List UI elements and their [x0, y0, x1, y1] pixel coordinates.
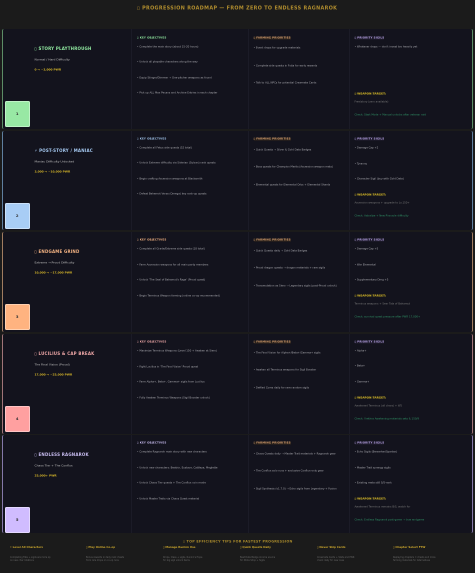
panel: stage 3 endgame grind: • Begin Terminus Weapon farming (online co-op recommended) — [137, 294, 220, 297]
panel: stage 1 story playthrough: • Talk to ALL NPCs for potential Crewmate Cards — [254, 82, 316, 85]
panel: stage 2 post-story maniac: • Elemental quests for Elemental Orbs + Elemental Shards — [254, 183, 330, 186]
stage number 3: 3 — [16, 314, 19, 319]
stage number 2: 2 — [16, 213, 19, 218]
priority sigils: ▯ PRIORITY SIGILS — [354, 340, 384, 344]
panel: stage 4 lucilius and cap break: • The Final Vision for Alpha+/Beta+/Gamma+ sigils — [254, 352, 320, 355]
panel: stage 3 endgame grind — [2, 232, 473, 332]
stage title: ▯ ENDLESS RAGNAROK — [34, 452, 89, 457]
panel: stage 1 story playthrough: • Equip Stinger/Dimmer → One-pitcher weapons as found — [137, 76, 212, 79]
panel: stage 3 endgame grind: • Transmutation as Siero → Legendary sigils (post-Proud unlock) — [254, 284, 337, 287]
power range: 25,000+ PWR — [34, 474, 57, 478]
panel: stage 4 lucilius and cap break: • Defiled Cores daily for rare random sigils — [254, 386, 309, 389]
weapon target — [354, 92, 386, 95]
power range: 17,000 → ~25,000 PWR — [34, 373, 72, 377]
priority sigils: ▯ PRIORITY SIGILS — [354, 36, 384, 40]
tip 3 — [163, 544, 202, 562]
panel: stage 5 endless ragnarok: • Unlock Master Traits via Chaos Quest material — [137, 497, 199, 500]
panel: stage 2 post-story maniac: • Damage Cap +2 — [354, 147, 378, 150]
panel: stage 5 endless ragnarok: • Complete Ragnarok main story with new characters — [137, 451, 207, 454]
panel: stage 3 endgame grind: • Damage Cap +5 — [354, 248, 378, 251]
tip 1: on new char rotations — [10, 559, 34, 562]
panel: stage 2 post-story maniac: • Begin crafting Ascension weapons at Blacksmith — [137, 177, 202, 180]
panel: stage 4 lucilius and cap break: Awakened Terminus (all chars) + W5 — [354, 405, 402, 408]
farming priorities: ▯ FARMING PRIORITIES — [254, 441, 291, 445]
stage title: ⚡ POST-STORY / MANIAC — [34, 148, 93, 153]
panel: stage 3 endgame grind: • War Elemental — [354, 263, 376, 266]
farming priorities — [254, 138, 291, 140]
priority sigils — [354, 442, 384, 444]
panel: stage 3 endgame grind: • Complete all Grade/Extreme side quests (18 total) — [137, 248, 205, 251]
stage title: ▯ LUCILIUS & CAP BREAK — [34, 351, 94, 356]
stage number 1: 1 — [16, 111, 19, 116]
panel: stage 5 endless ragnarok — [2, 435, 473, 533]
panel: stage 1 story playthrough: • Complete side quests in Fotia for early rewards — [254, 64, 317, 67]
panel: stage 3 endgame grind: • Supplementary Dmg +5 — [354, 279, 388, 282]
panel: stage 5 endless ragnarok: • Master Trait synergy sigils — [354, 466, 391, 469]
panel: stage 5 endless ragnarok: Awakened Terminus remains BiS, watch for — [354, 506, 410, 509]
priority sigils — [354, 37, 384, 39]
tip 5 — [317, 544, 354, 562]
tip 4 — [240, 544, 275, 562]
farming priorities — [254, 239, 291, 241]
priority sigils: ▯ PRIORITY SIGILS — [354, 238, 384, 242]
panel: stage 4 lucilius and cap break: • Gamma+ — [354, 381, 369, 384]
farming priorities — [254, 341, 291, 343]
key objectives: ▯ KEY OBJECTIVES — [137, 137, 166, 141]
panel: stage 4 lucilius and cap break: • Fight Lucilius in 'The Final Vision' Proud quest — [137, 365, 198, 368]
weapon target: ▯ WEAPON TARGET: — [354, 293, 386, 297]
panel: stage 1 story playthrough: Check: Start Mode + Manual unlocks after veteran raid — [354, 114, 426, 117]
panel: stage 2 post-story maniac — [2, 131, 473, 230]
tip 2: ▯ Play Online Co-op — [86, 544, 115, 548]
key objectives: ▯ KEY OBJECTIVES — [137, 238, 166, 242]
panel: stage 1 story playthrough: • Complete the main story (about 15-20 hours) — [137, 46, 198, 49]
tip 2: Bonus rewards in daily rank chests — [86, 556, 124, 559]
footer heading: ▯ TOP EFFICIENCY TIPS FOR FASTEST PROGRESSION — [183, 539, 293, 543]
panel: stage 2 post-story maniac: • Character Sigil (buy with Gold Data) — [354, 178, 404, 181]
panel: stage 2 post-story maniac: • Quick Quests → Silver & Gold Data Badges — [254, 148, 311, 151]
tip 6 — [393, 544, 436, 562]
panel: stage 5 endless ragnarok: • The Conflux solo runs + exclusive Conflux-only gear — [254, 470, 324, 473]
panel: stage 1 story playthrough: Free/story (zero available) — [354, 101, 388, 104]
tip 4: for Mode Shop + Sigils — [240, 559, 265, 562]
panel: stage 4 lucilius and cap break: Check: Vrethra Awakening materials sets & 150/9 — [354, 418, 419, 421]
weapon target — [354, 294, 386, 297]
panel: stage 4 lucilius and cap break: • Beta+ — [354, 365, 365, 368]
tip 5: ▯ Never Skip Cards — [317, 544, 345, 548]
difficulty: Extreme → Proud Difficulty — [34, 260, 74, 264]
tip 2 — [86, 544, 124, 562]
panel: stage 5 endless ragnarok: • Chaos Quests daily → Master Trait materials + Ragnarok gear — [254, 452, 336, 455]
panel: stage 4 lucilius and cap break: • Alpha+ — [354, 350, 366, 353]
tip 4: ▯ Quick Quests Daily — [240, 544, 271, 548]
stage number 1 — [5, 100, 30, 126]
panel: stage 3 endgame grind: • Unlock 'The Seal of Bahamut's Rage' (Proud quest) — [137, 279, 205, 282]
weapon target — [354, 497, 386, 500]
panel: stage 1 story playthrough: • Whatever drops — don't invest too heavily yet — [354, 46, 417, 49]
panel: stage 2 post-story maniac: • Boss quests for Champion Merits (Ascension weapon mats) — [254, 166, 333, 169]
power range: 10,000 → ~17,000 PWR — [34, 271, 72, 275]
weapon target: ▯ WEAPON TARGET: — [354, 91, 386, 95]
priority sigils — [354, 138, 384, 140]
panel: stage 5 endless ragnarok: • Existing meta still S/S-rank — [354, 482, 392, 485]
tip 6: farming materials for Alternatives — [393, 559, 430, 562]
weapon target — [354, 193, 386, 196]
panel: stage 4 lucilius and cap break: • Maximize Terminus Weapons (Level 150 + Awaken at Siero) — [137, 350, 217, 353]
tip 1: • Level All Characters — [10, 544, 43, 548]
priority sigils — [354, 239, 384, 241]
tip 3: for big sigil unlock items — [163, 559, 190, 562]
panel: stage 3 endgame grind: • Farm Ascension weapons for all main party members — [137, 263, 208, 266]
tip 1: Completing Fate + sigils are more xp — [10, 556, 51, 559]
weapon target: ▯ WEAPON TARGET: — [354, 395, 386, 399]
panel: stage 4 lucilius and cap break: • Awaken all Terminus weapons for Sigil Booster — [254, 369, 316, 372]
panel: stage 2 post-story maniac: • Tyranny — [354, 162, 367, 165]
key objectives: ▯ KEY OBJECTIVES — [137, 340, 166, 344]
farming priorities: ▯ FARMING PRIORITIES — [254, 340, 291, 344]
panel: stage 5 endless ragnarok: • Echo Sigils (Berserker/Spartan) — [354, 451, 397, 454]
stage number 4: 4 — [16, 416, 19, 421]
key objectives: ▯ KEY OBJECTIVES — [137, 36, 166, 40]
panel: stage 2 post-story maniac: • Unlock Extreme difficulty via Siderian (Sylvan) rank quests — [137, 162, 216, 165]
stage number 2 — [5, 202, 30, 228]
panel: stage 2 post-story maniac: Check: Astralize + New Pinnacle difficulty — [354, 215, 409, 218]
tip 1 — [10, 544, 51, 562]
priority sigils — [354, 341, 384, 343]
farming priorities — [254, 442, 291, 444]
tip 3: Drops, Class + sigils, Runinn's Hope — [163, 556, 202, 559]
priority sigils: ▯ PRIORITY SIGILS — [354, 441, 384, 445]
priority sigils: ▯ PRIORITY SIGILS — [354, 137, 384, 141]
panel: stage 4 lucilius and cap break — [2, 334, 473, 434]
difficulty: Chaos Tier + The Conflux — [34, 464, 73, 468]
difficulty: Normal / Hard Difficulty — [34, 58, 70, 62]
panel: stage 3 endgame grind: Check: survival quest pressure after PWR 17,000+ — [354, 316, 420, 319]
stage number 4 — [5, 406, 30, 432]
key objectives: ▯ KEY OBJECTIVES — [137, 441, 166, 445]
panel: stage 3 endgame grind: Terminus weapons + Seer Tala of Bahamut — [354, 303, 410, 306]
header band — [0, 0, 475, 28]
panel: stage 1 story playthrough: • Event drops for upgrade materials — [254, 47, 300, 50]
tip 6: ▯ Chapter Select FTW — [393, 544, 425, 548]
title: ▯ PROGRESSION ROADMAP — FROM ZERO TO ENDLESS RAGNAROK — [137, 5, 337, 11]
panel: stage 2 post-story maniac: • Complete all Fetus side quests (52 total) — [137, 147, 192, 150]
power range: 0 → ~3,000 PWR — [34, 68, 61, 72]
panel: stage 2 post-story maniac: • Defeat Behemot Versa (Omega) key rank-up quests — [137, 193, 207, 196]
panel: stage 5 endless ragnarok: • Sigil Synthesis (v1.7.0) → Echo sigils from Legendary + Fusion — [254, 487, 337, 490]
panel: stage 4 lucilius and cap break: • Farm Alpha+, Beta+, Gamma+ sigils from Lucilius — [137, 381, 205, 384]
tip 2: from rare drops on co-op runs — [86, 559, 119, 562]
tip 5: Crewmate Cards + Stats and PWR — [317, 556, 354, 559]
farming priorities: ▯ FARMING PRIORITIES — [254, 238, 291, 242]
weapon target: ▯ WEAPON TARGET: — [354, 192, 386, 196]
stage number 5 — [5, 506, 30, 532]
difficulty: Maniac Difficulty Unlocked — [34, 160, 74, 164]
panel: stage 5 endless ragnarok: • Unlock new characters: Beatrix, Eustace, Cattleya, Meglette — [137, 466, 217, 469]
panel: stage 1 story playthrough — [2, 29, 473, 129]
difficulty: The Final Vision (Proud) — [34, 362, 70, 366]
panel: efficiency tips footer — [0, 533, 475, 573]
tip 6: Replaying chapters = chests and more — [393, 556, 436, 559]
weapon target: ▯ WEAPON TARGET: — [354, 496, 386, 500]
tip 3: ▯ Manage Runinn Use — [163, 544, 196, 548]
farming priorities: ▯ FARMING PRIORITIES — [254, 137, 291, 141]
farming priorities: ▯ FARMING PRIORITIES — [254, 36, 291, 40]
stage number 3 — [5, 304, 30, 330]
farming priorities — [254, 37, 291, 39]
panel: stage 5 endless ragnarok: Check: Endless Ragnarok post-game → true endgame — [354, 519, 424, 522]
stage title: ▯ STORY PLAYTHROUGH — [34, 46, 92, 51]
panel: stage 2 post-story maniac: Ascension weapons + upgrade to Lv.150+ — [354, 202, 410, 205]
weapon target — [354, 396, 386, 399]
stage number 5: 5 — [16, 517, 19, 522]
tip 4: Best Data Badge income source — [240, 556, 275, 559]
power range: 3,000 → ~10,000 PWR — [34, 170, 70, 174]
panel: stage 5 endless ragnarok: • Unlock Chaos Tier quests + The Conflux coin mode — [137, 482, 206, 485]
tip 5: check daily for new ones — [317, 559, 344, 562]
panel: stage 3 endgame grind: • Proud dragon quests → dragon materials + rare sigils — [254, 267, 325, 270]
stage title: ▯ ENDGAME GRIND — [34, 249, 80, 254]
panel: stage 3 endgame grind: • Quick Quests daily → Gold Data Badges — [254, 249, 307, 252]
panel: stage 1 story playthrough: • Pick up ALL Max Pecans and Archive Entries in each chapter — [137, 92, 217, 95]
panel: stage 4 lucilius and cap break: • Fully Awaken Terminus Weapons (Sigil Booster unlock) — [137, 396, 210, 399]
panel: stage 1 story playthrough: • Unlock all playable characters along the way — [137, 61, 198, 64]
